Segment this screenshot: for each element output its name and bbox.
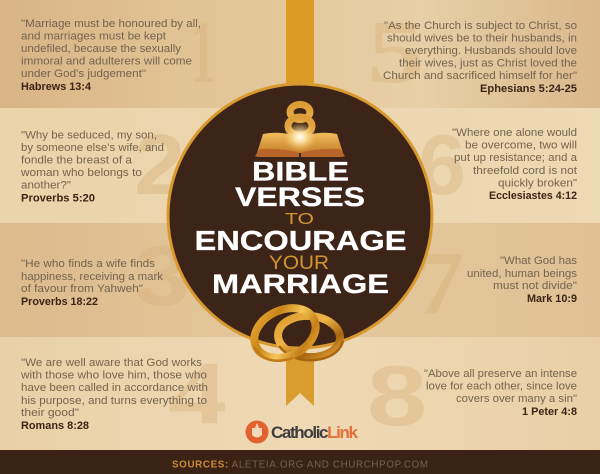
verse 7: Mark 10:9: must not divide": [493, 280, 577, 292]
verse 6: Ecclesiastes 4:12: Ecclesiastes 4:12: [489, 190, 577, 202]
verse 4: Romans 8:28: their good": [21, 407, 79, 419]
verse 3: Proverbs 18:22: happiness, receiving a mark: [21, 271, 164, 283]
number 2: 2: [134, 118, 185, 213]
verse 6: Ecclesiastes 4:12: "Where one alone would: [452, 127, 577, 139]
icon: golden 8 over open book: [255, 104, 345, 157]
icon: wedding rings: [246, 299, 343, 367]
footer bar: [0, 450, 600, 474]
verse 1: Hebrews 13:4: immoral and adulterers will come: [21, 56, 192, 68]
golden number 8: [288, 104, 312, 135]
verse 2: Proverbs 5:20: by someone else's wife, and: [21, 142, 164, 154]
verse 5: Ephesians 5:24-25: [383, 20, 577, 95]
verse 6: Ecclesiastes 4:12: [452, 127, 578, 202]
verse 1: Hebrews 13:4: Habrews 13:4: [21, 81, 91, 93]
verse 7: Mark 10:9: "What God has: [500, 255, 578, 267]
verse 2: Proverbs 5:20: Proverbs 5:20: [21, 192, 95, 204]
verse 5: Ephesians 5:24-25: their wives, just as Christ loved the: [399, 58, 577, 70]
verse 3: Proverbs 18:22: Proverbs 18:22: [21, 296, 98, 308]
number 6: 6: [418, 118, 466, 213]
verse 2: Proverbs 5:20: another?": [21, 180, 71, 192]
verse 1: Hebrews 13:4: under God's judgement": [21, 68, 146, 80]
verse 7: Mark 10:9: Mark 10:9: [527, 293, 577, 305]
title: BIBLE: [252, 156, 349, 186]
central circle: [168, 84, 432, 348]
verse 1: Hebrews 13:4: "Marriage must be honoured by all,: [21, 18, 201, 30]
logo icon: [246, 420, 268, 444]
book glow: [283, 122, 317, 152]
verse 8: 1 Peter 4:8: covers over many a sin": [456, 393, 577, 405]
verse 1: Hebrews 13:4: and marriages must be kept: [21, 30, 166, 42]
verse 8: 1 Peter 4:8: [424, 368, 577, 418]
number 4: 4: [168, 344, 227, 443]
verse 2: Proverbs 5:20: woman who belongs to: [20, 167, 142, 179]
verse 6: Ecclesiastes 4:12: threefold cord is not: [473, 165, 577, 177]
verse 8: 1 Peter 4:8: "Above all preserve an intense: [424, 368, 577, 380]
verse 5: Ephesians 5:24-25: should wives be to their husbands, in: [387, 32, 577, 44]
verse 3: Proverbs 18:22: "He who finds a wife finds: [21, 258, 156, 270]
verse 5: Ephesians 5:24-25: Ephesians 5:24-25: [480, 83, 577, 95]
verse 7: Mark 10:9: [467, 255, 578, 305]
verse 5: Ephesians 5:24-25: "As the Church is subject to Christ, so: [384, 20, 577, 32]
book pages: [257, 133, 343, 153]
number 1: 1: [190, 3, 216, 102]
number 3: 3: [134, 229, 190, 324]
verse 6: Ecclesiastes 4:12: be overcome, two will: [465, 140, 577, 152]
verse 4: Romans 8:28: "We are well aware that God works: [21, 357, 203, 369]
verse 3: Proverbs 18:22: [21, 258, 164, 308]
title: YOUR: [269, 252, 329, 274]
verse 8: 1 Peter 4:8: love for each other, since love: [426, 380, 577, 392]
title: VERSES: [235, 182, 365, 212]
ribbon: top section: [286, 0, 314, 90]
number 5: 5: [367, 3, 425, 102]
right ring: [277, 314, 343, 360]
verse 3: Proverbs 18:22: of favour from Yahweh": [21, 283, 143, 295]
ribbon: bottom tail: [286, 358, 314, 406]
logo wordmark: CatholicLink: [271, 423, 359, 442]
title: [194, 156, 406, 299]
number 7: 7: [415, 234, 464, 333]
logo: CatholicLink: [246, 420, 359, 444]
verse 6: Ecclesiastes 4:12: put up resistance; and a: [454, 152, 578, 164]
title: ENCOURAGE: [194, 225, 406, 256]
verse 4: Romans 8:28: have been called in accordance with: [21, 382, 208, 394]
verse 4: Romans 8:28: [20, 357, 208, 432]
left ring: [246, 299, 324, 367]
verse 2: Proverbs 5:20: "Why be seduced, my son,: [21, 130, 157, 142]
verse 6: Ecclesiastes 4:12: quickly broken": [498, 178, 577, 190]
verse 8: 1 Peter 4:8: 1 Peter 4:8: [522, 406, 577, 418]
title: MARRIAGE: [212, 269, 389, 299]
verse 5: Ephesians 5:24-25: everything. Husbands should love: [405, 45, 577, 57]
verse 7: Mark 10:9: united, human beings: [467, 268, 578, 280]
verse 5: Ephesians 5:24-25: Church and sacrificed himself for her": [383, 70, 577, 82]
title: TO: [285, 211, 314, 228]
verse 4: Romans 8:28: his purpose, and turns everything to: [21, 395, 207, 407]
verse 4: Romans 8:28: Romans 8:28: [21, 420, 89, 432]
number 8: 8: [367, 349, 427, 444]
verse 2: Proverbs 5:20: fondle the breast of a: [21, 154, 133, 166]
verse 1: Hebrews 13:4: undefiled, because the sexually: [21, 43, 182, 55]
footer: sources: SOURCES: ALETEIA.ORG AND CHURCHPOP.COM: [172, 460, 428, 470]
verse 2: Proverbs 5:20: [20, 130, 164, 204]
verse 4: Romans 8:28: with those who love him, those who: [20, 370, 207, 382]
verse 1: Hebrews 13:4: [21, 18, 201, 93]
